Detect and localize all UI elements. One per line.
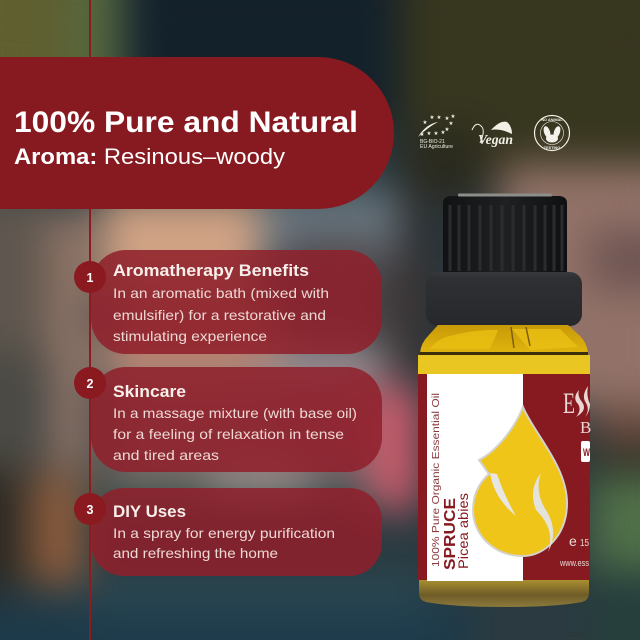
icon: no animal testing logo (534, 116, 570, 150)
card 3 body: In a spray for energy purification (113, 525, 335, 541)
label text: spruce: SPRUCE (442, 498, 459, 570)
badge 1: 1 (87, 271, 94, 285)
icon: vegan logo: Vegan (478, 133, 513, 148)
icon: EU organic leaf logo: ★ (437, 114, 442, 121)
label brand text (559, 386, 591, 568)
icon: no animal testing logo: NO ANIMAL (541, 118, 563, 122)
bottle cap (443, 194, 567, 272)
card 2: skincare (91, 367, 382, 472)
yellow band (418, 355, 590, 374)
badge 3 (74, 493, 106, 525)
icon: EU organic leaf logo: ★ (434, 130, 439, 137)
header banner (0, 57, 394, 209)
card 2 body: for a feeling of relaxation in tense (113, 426, 344, 442)
label brand text: W (583, 447, 590, 459)
card 3 body (113, 525, 335, 561)
icon: EU organic leaf logo (418, 113, 456, 150)
drop icon (473, 407, 567, 556)
card 2 heading: Skincare (113, 382, 186, 401)
card 3 body: and refreshing the home (113, 545, 278, 561)
label text: product line: 100% Pure Organic Essential Oil (431, 393, 442, 567)
icon: EU organic leaf logo: ★ (420, 131, 425, 138)
icon: EU organic leaf logo: ★ (451, 113, 456, 120)
icon: EU organic leaf logo: ★ (430, 114, 435, 121)
card 3 heading: DIY Uses (113, 502, 186, 521)
badge 3: 3 (87, 503, 94, 517)
label brand text: E (563, 387, 575, 420)
aroma line: Aroma: Resinous–woody (14, 144, 285, 169)
card 1 body (113, 285, 329, 344)
card 2 body: In a massage mixture (with base oil) (113, 405, 357, 421)
icon: EU organic leaf logo: ★ (445, 115, 450, 122)
label brand text: e (569, 533, 577, 549)
card 1 body: stimulating experience (113, 328, 267, 344)
card 2 body: and tired areas (113, 447, 219, 463)
label text: latin name: Picea abies (455, 493, 471, 569)
card 1 body: emulsifier) for a restorative and (113, 307, 326, 323)
icon: no animal testing logo: TESTING (544, 146, 560, 150)
icon: EU organic leaf logo: ★ (423, 119, 428, 126)
icon: EU organic leaf logo: ★ (441, 129, 446, 136)
badge 1 (74, 261, 106, 293)
card 2 body (113, 405, 357, 463)
icon: EU organic leaf logo: EU Agriculture (420, 144, 453, 150)
bottle (418, 194, 591, 607)
badge 2 (74, 367, 106, 399)
label brand text: www.ess (559, 558, 589, 568)
icon: vegan logo (472, 122, 513, 148)
icon: EU organic leaf logo: ★ (445, 126, 450, 133)
icon: EU organic leaf logo: BG-BIO-21 (420, 139, 445, 145)
label brand text: 15 (580, 538, 589, 549)
card 1 body: In an aromatic bath (mixed with (113, 285, 329, 301)
vertical timeline line (89, 0, 91, 640)
label (418, 374, 591, 581)
card 3: DIY uses (91, 488, 382, 576)
bottle base (419, 580, 589, 607)
icon: EU organic leaf logo: ★ (427, 130, 432, 137)
card 1: aromatherapy benefits (91, 250, 382, 354)
title: 100% Pure and Natural (14, 106, 358, 139)
bottle collar (426, 272, 582, 326)
badge 2: 2 (87, 377, 94, 391)
icon: EU organic leaf logo: ★ (449, 120, 454, 127)
label brand text: B (580, 418, 591, 437)
card 1 heading: Aromatherapy Benefits (113, 261, 309, 280)
glass shoulder with oil (420, 325, 588, 355)
